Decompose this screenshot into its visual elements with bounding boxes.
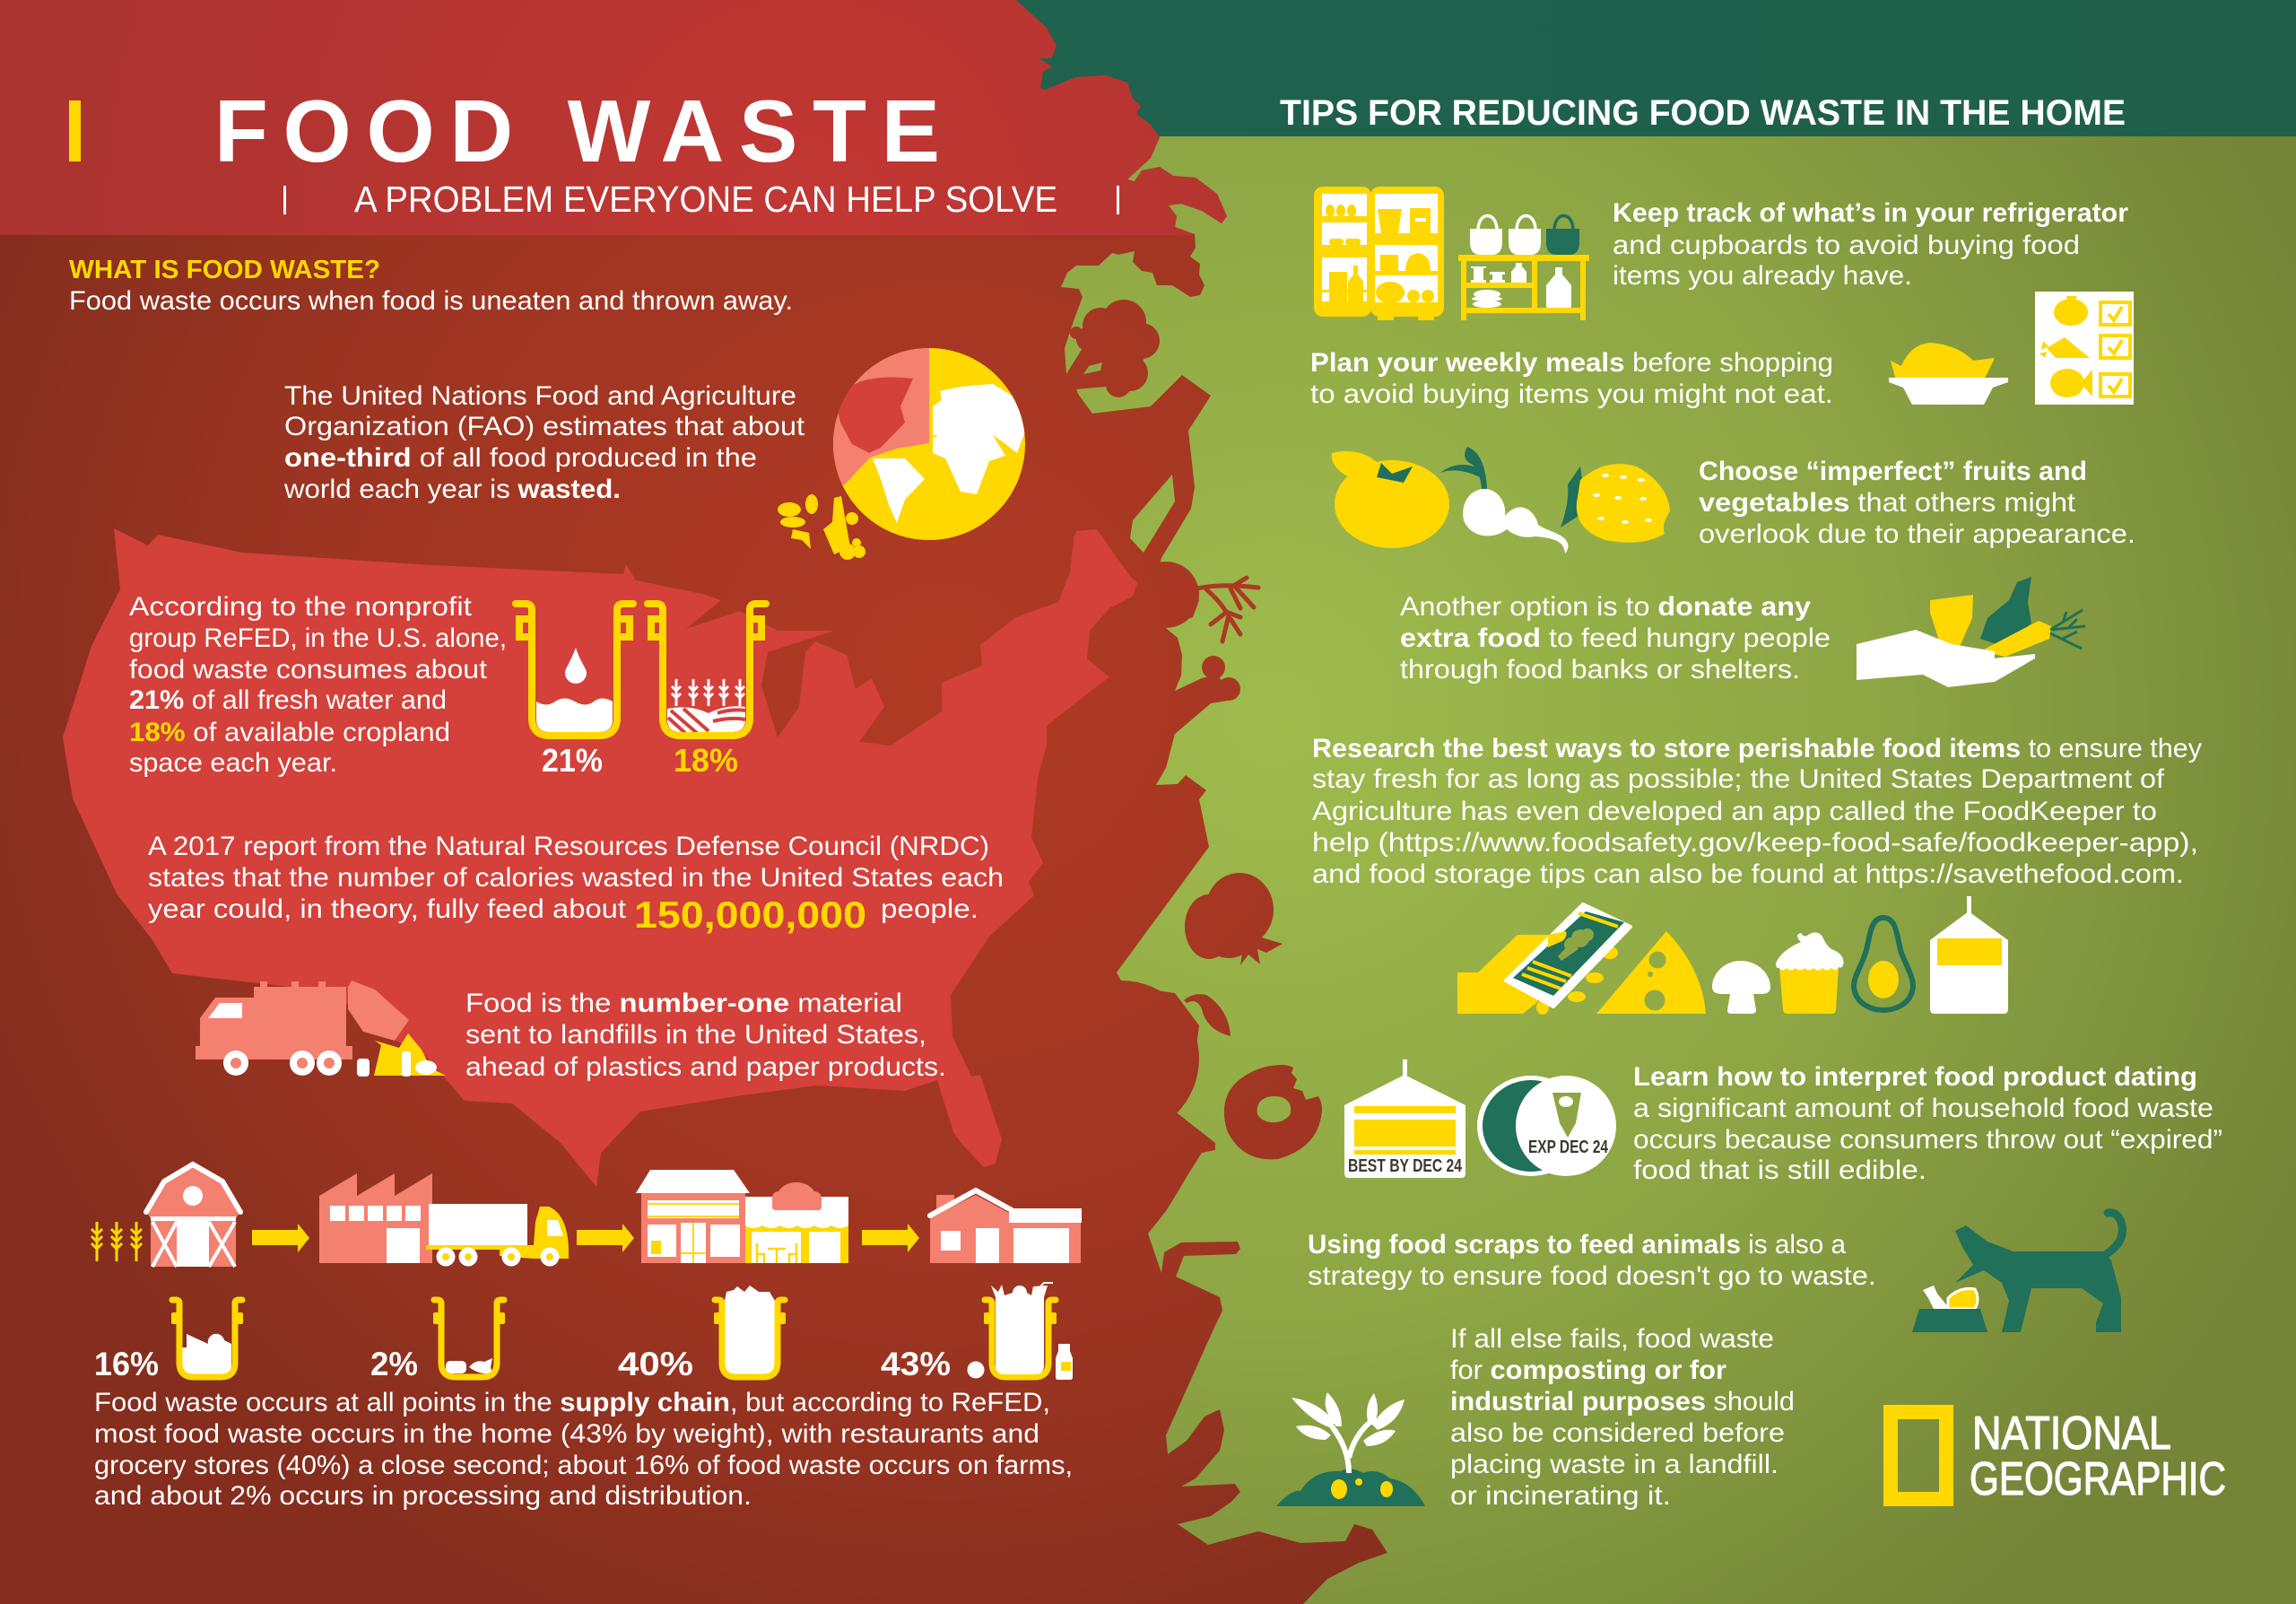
text block: tip product dating: a significant amount of household food waste [1633,1094,2213,1123]
text block: tip composting: or incinerating it. [1450,1481,1671,1511]
text block: tip keep track: and cupboards to avoid buying food [1613,231,2080,260]
icon: apple [967,1362,985,1378]
bar: retail 40%: 40% [618,1346,693,1382]
text block: tip composting: also be considered before [1450,1418,1785,1448]
text block: tip feed animals [1308,1230,1876,1291]
date label: BEST BY DEC 24 [1348,1156,1463,1176]
icon: shopping bags [1470,215,1579,255]
text block: tip research storage [1312,734,2202,889]
text block: ReFED resources: 18% of available cropland [129,718,450,747]
icon: broccoli silhouette [1065,300,1160,397]
bar: home 43% [881,1283,1073,1382]
text block: supply chain [94,1388,1073,1511]
subtitle: A PROBLEM EVERYONE CAN HELP SOLVE [354,179,1057,220]
label: 21% [542,742,603,779]
text block: supply chain: Food waste occurs at all points in the supply chain, but according to ReFED, [94,1388,1050,1417]
text block: FAO estimate: The United Nations Food and Agriculture [284,381,796,411]
text block: landfills: Food is the number-one material [465,989,902,1018]
icon: tomato silhouette [1185,873,1283,965]
icon: house [930,1190,1082,1263]
text block: landfills [465,989,946,1082]
icon: hand donating food [1857,577,2085,687]
header band: tips panel [987,0,2296,136]
bar: farms 16% [94,1300,243,1382]
icon: grocery store [636,1170,750,1263]
icon: best by package [1344,1059,1465,1178]
icon: mushroom [1712,961,1770,1014]
text block: tip feed animals: strategy to ensure food doesn't go to waste. [1308,1261,1876,1291]
icon: garbage truck dumping food [196,981,446,1077]
text block: tip plan meals: Plan your weekly meals before shopping [1310,348,1833,378]
text block: tip composting [1450,1324,1795,1511]
icon: carrot silhouette [1133,562,1258,641]
icon: apple silhouette [1043,981,1231,1137]
icon: strawberry [1561,464,1670,543]
text block: NRDC report: people. [881,894,978,924]
text block: NRDC report: year could, in theory, fully feed about [148,894,627,924]
text block: supply chain: and about 2% occurs in processing and distribution. [94,1481,752,1511]
chart: share of waste pots [94,1283,1073,1382]
yellow title bar [69,100,81,161]
bar: farms 16%: 16% [94,1346,159,1382]
icon: meal bowl [1889,343,2008,405]
title block [69,82,1119,220]
text block: ReFED resources: space each year. [129,748,337,778]
big number: 150,000,000 [634,894,866,936]
icon: barn [146,1164,240,1267]
text block: NRDC report [148,832,1004,936]
background: green tips panel [807,0,2296,1604]
icon: globe with one third wasted [778,341,1027,560]
icon: delivery truck [426,1204,569,1267]
title: FOOD WASTE [214,82,940,180]
text block: tip product dating: occurs because consumers throw out “expired” [1633,1125,2222,1155]
bar: home 43%: 43% [881,1346,951,1382]
icon: wheat [91,1222,142,1261]
icon: food falling from globe [778,494,865,560]
chart: food supply chain row [91,1164,1082,1267]
bar: processing 2% [370,1300,505,1382]
text block: FAO estimate [283,381,805,504]
icon: restaurant [745,1182,848,1263]
arrow: farm to factory [252,1224,309,1252]
text block: tip research storage: Research the best ways to store perishable food items to ensure they [1312,734,2202,763]
icon: checklist [2035,292,2134,405]
text block: landfills: sent to landfills in the United States, [465,1020,926,1050]
text block: tip imperfect produce [1699,457,2135,549]
food silhouette panel: left red side [0,0,1387,1604]
text block: what is food waste [69,256,793,316]
text block: tip composting: industrial purposes should [1450,1387,1795,1417]
text block: tip imperfect produce: Choose “imperfect” fruits and [1699,457,2087,486]
icon: turnip [1440,447,1568,554]
subtitle tick right [1117,186,1119,214]
icon: dog bowl [1912,1286,1987,1332]
icon: bitten donut silhouette [1224,1065,1322,1159]
icon: factory [319,1173,432,1263]
text block: supply chain: grocery stores (40%) a close second; about 16% of food waste occurs on farms, [94,1451,1073,1480]
text block: ReFED resources [129,592,507,778]
text block: tip product dating [1633,1062,2222,1185]
text block: tip plan meals: to avoid buying items you might not eat. [1310,379,1833,409]
text block: tip donate: through food banks or shelters. [1400,655,1800,684]
text block: ReFED resources: 21% of all fresh water and [129,685,447,715]
text block: FAO estimate: world each year is wasted. [283,475,621,504]
icon: pot with water 21% [516,604,633,779]
text block: tip research storage: stay fresh for as long as possible; the United States Department of [1312,764,2165,794]
icon: dog eating [1912,1213,2122,1332]
icon: expiry can [1477,1076,1616,1176]
text block: NRDC report: A 2017 report from the Natural Resources Defense Council (NRDC) [148,832,989,861]
text block: supply chain: most food waste occurs in the home (43% by weight), with restaurants and [94,1419,1039,1449]
arrow: truck to stores [577,1224,634,1252]
heading: WHAT IS FOOD WASTE? [69,256,380,284]
icon: bone knob silhouette [1175,656,1240,734]
icon: milk carton [1930,896,2008,1014]
text block: tip plan meals [1310,348,1833,409]
text block: tip donate [1400,592,1831,684]
text block: NRDC report: states that the number of calories wasted in the United States each [148,863,1004,893]
logo: National Geographic [1891,1408,2226,1505]
definition: Food waste occurs when food is uneaten and thrown away. [69,286,793,316]
text block: landfills: ahead of plastics and paper products. [465,1052,946,1082]
icon: hand holding phone [1457,904,1631,1015]
text block: tip keep track [1613,198,2128,291]
logo: National Geographic: GEOGRAPHIC [1970,1453,2226,1505]
text block: tip composting: for composting or for [1450,1356,1726,1385]
bar: processing 2%: 2% [370,1346,418,1382]
icon: imperfect apple [1332,451,1449,548]
text block: FAO estimate: Organization (FAO) estimates that about [284,412,805,441]
subtitle tick left [283,186,286,214]
text block: tip imperfect produce: overlook due to their appearance. [1699,519,2135,549]
icon: compost plant [1276,1392,1425,1506]
text block: tip feed animals: Using food scraps to feed animals is also a [1308,1230,1846,1260]
text block: tip imperfect produce: vegetables that others might [1699,488,2076,518]
icon: pot with cropland 18% [648,604,766,779]
label: 18% [674,742,738,779]
map: United States [63,528,1137,1187]
text block: ReFED resources: group ReFED, in the U.S. alone, [129,623,507,653]
text block: ReFED resources: According to the nonprofit [129,592,473,622]
icon: shelf and bags [1458,215,1589,320]
arrow: stores to home [862,1224,919,1252]
icon: refrigerator [1314,187,1444,320]
icon: avocado [1854,918,1913,1010]
icon: cheese [1596,931,1706,1014]
icon: cupcake [1776,932,1843,1014]
date label: EXP DEC 24 [1528,1138,1609,1157]
text block: FAO estimate: one-third of all food produced in the [284,443,757,473]
icon: spilled food [357,1033,446,1077]
text block: tip donate: Another option is to donate any [1400,592,1811,622]
tips heading: TIPS FOR REDUCING FOOD WASTE IN THE HOME [1280,93,2126,133]
text block: tip keep track: Keep track of what’s in your refrigerator [1613,198,2128,228]
text block: tip composting: placing waste in a landfill. [1450,1450,1779,1479]
text block: tip keep track: items you already have. [1613,261,1912,291]
text block: tip research storage: Agriculture has even developed an app called the FoodKeeper to [1312,797,2157,826]
text block: tip product dating: Learn how to interpret food product dating [1633,1062,2197,1092]
text block: tip research storage: and food storage tips can also be found at https://savethefood.com. [1312,859,2184,889]
icon: bottle [1056,1344,1073,1380]
text block: tip donate: extra food to feed hungry people [1400,623,1831,653]
text block: tip research storage: help (https://www.foodsafety.gov/keep-food-safe/foodkeeper-app), [1312,828,2198,858]
text block: tip product dating: food that is still edible. [1633,1155,1926,1185]
logo: National Geographic: NATIONAL [1972,1408,2171,1460]
text block: tip composting: If all else fails, food waste [1450,1324,1774,1354]
text block: ReFED resources: food waste consumes about [129,655,488,684]
bar: retail 40% [618,1286,786,1382]
